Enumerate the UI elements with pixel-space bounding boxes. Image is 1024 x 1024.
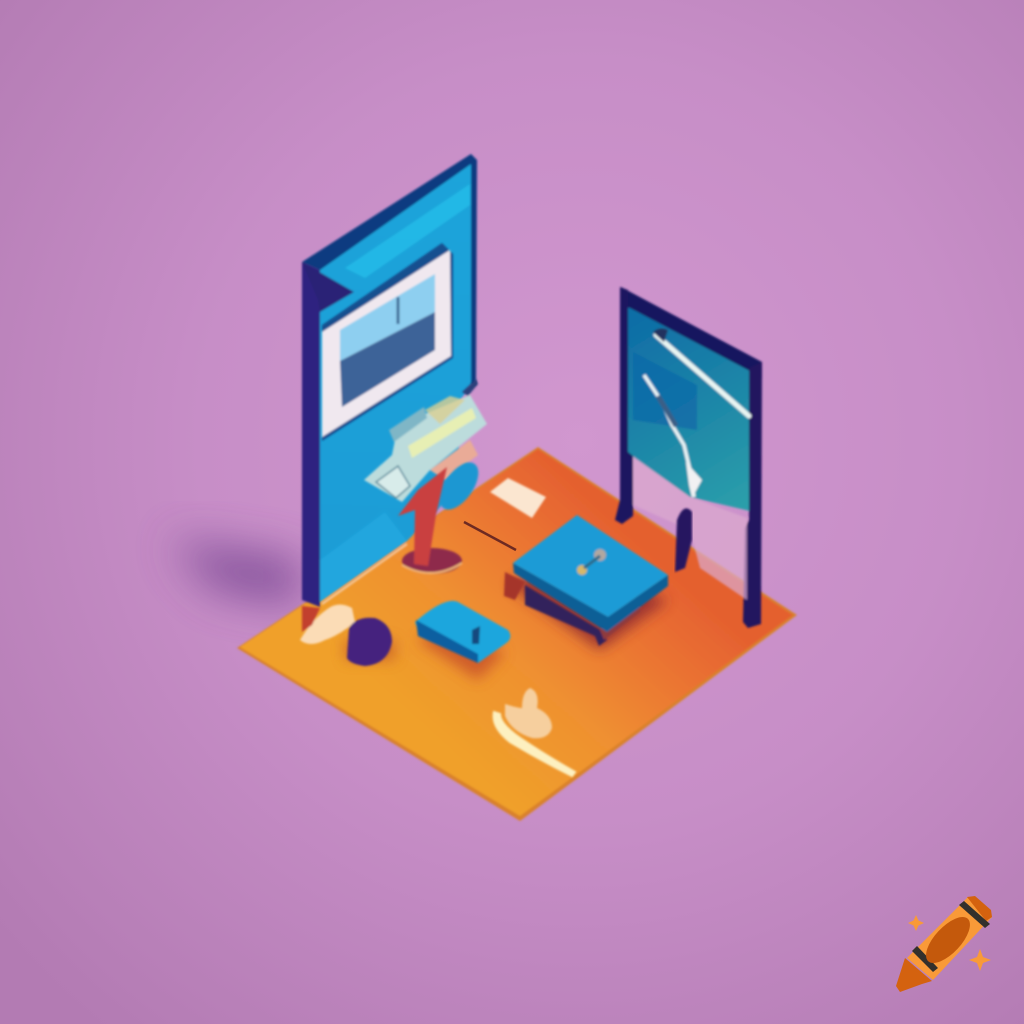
board frame top <box>621 287 762 378</box>
table side <box>513 563 668 632</box>
crayon top stripe <box>959 901 990 928</box>
cream stripe <box>494 712 575 776</box>
cream blob and purple ball <box>300 604 392 666</box>
blade handle <box>644 375 694 497</box>
cushion top <box>415 601 510 663</box>
floor mat paper <box>490 478 546 518</box>
red stand <box>398 467 462 574</box>
board right post <box>743 362 762 628</box>
large star <box>969 949 991 971</box>
wall cast shadow <box>170 540 300 605</box>
wall top highlight band <box>345 184 470 278</box>
crayon logo <box>896 896 992 992</box>
cushion notch <box>472 626 480 644</box>
board lower gap <box>633 456 747 600</box>
crayon label oval <box>919 910 977 970</box>
floor bunny ornament <box>494 688 575 776</box>
crayon bottom stripe <box>912 946 938 972</box>
window frame <box>322 250 451 437</box>
window mullion <box>396 297 400 324</box>
stand post <box>398 467 447 566</box>
dark foot <box>302 606 320 632</box>
wall dark corner triangle <box>302 262 354 312</box>
chair back <box>675 508 692 572</box>
wall top edge <box>302 154 477 385</box>
table ornament <box>577 549 606 575</box>
wall base band <box>320 512 407 602</box>
cushion <box>415 601 510 663</box>
board panel <box>627 298 750 511</box>
left wall <box>302 154 477 607</box>
stand base <box>402 548 462 574</box>
crayon body <box>907 897 992 980</box>
window pane dark <box>340 312 435 407</box>
crayon cap <box>967 896 992 921</box>
blue orb behind stand <box>432 456 486 516</box>
peach shape <box>505 688 552 738</box>
blade tip <box>686 462 702 498</box>
board left post <box>615 287 633 524</box>
window <box>322 243 453 441</box>
wall side strip <box>302 262 320 607</box>
floor slot <box>464 522 516 550</box>
rail hook <box>653 328 668 342</box>
peach glow under shelf <box>430 440 478 480</box>
crayon tip <box>896 958 932 992</box>
cushion front <box>416 620 478 663</box>
right board <box>615 287 762 628</box>
table legs <box>504 572 525 600</box>
small star <box>908 915 924 931</box>
rail <box>656 335 749 416</box>
wall blue panel <box>318 160 473 602</box>
table <box>504 515 668 646</box>
cream blob <box>300 604 355 644</box>
window pane sky <box>340 274 435 361</box>
floor shadows <box>345 555 668 680</box>
purple ball <box>347 618 392 666</box>
table top <box>513 515 668 617</box>
window shadow <box>322 243 453 441</box>
board dark patch <box>633 352 697 430</box>
wall shelf with papers <box>364 379 487 502</box>
floor skirting highlight <box>322 544 407 604</box>
floor <box>237 447 797 821</box>
